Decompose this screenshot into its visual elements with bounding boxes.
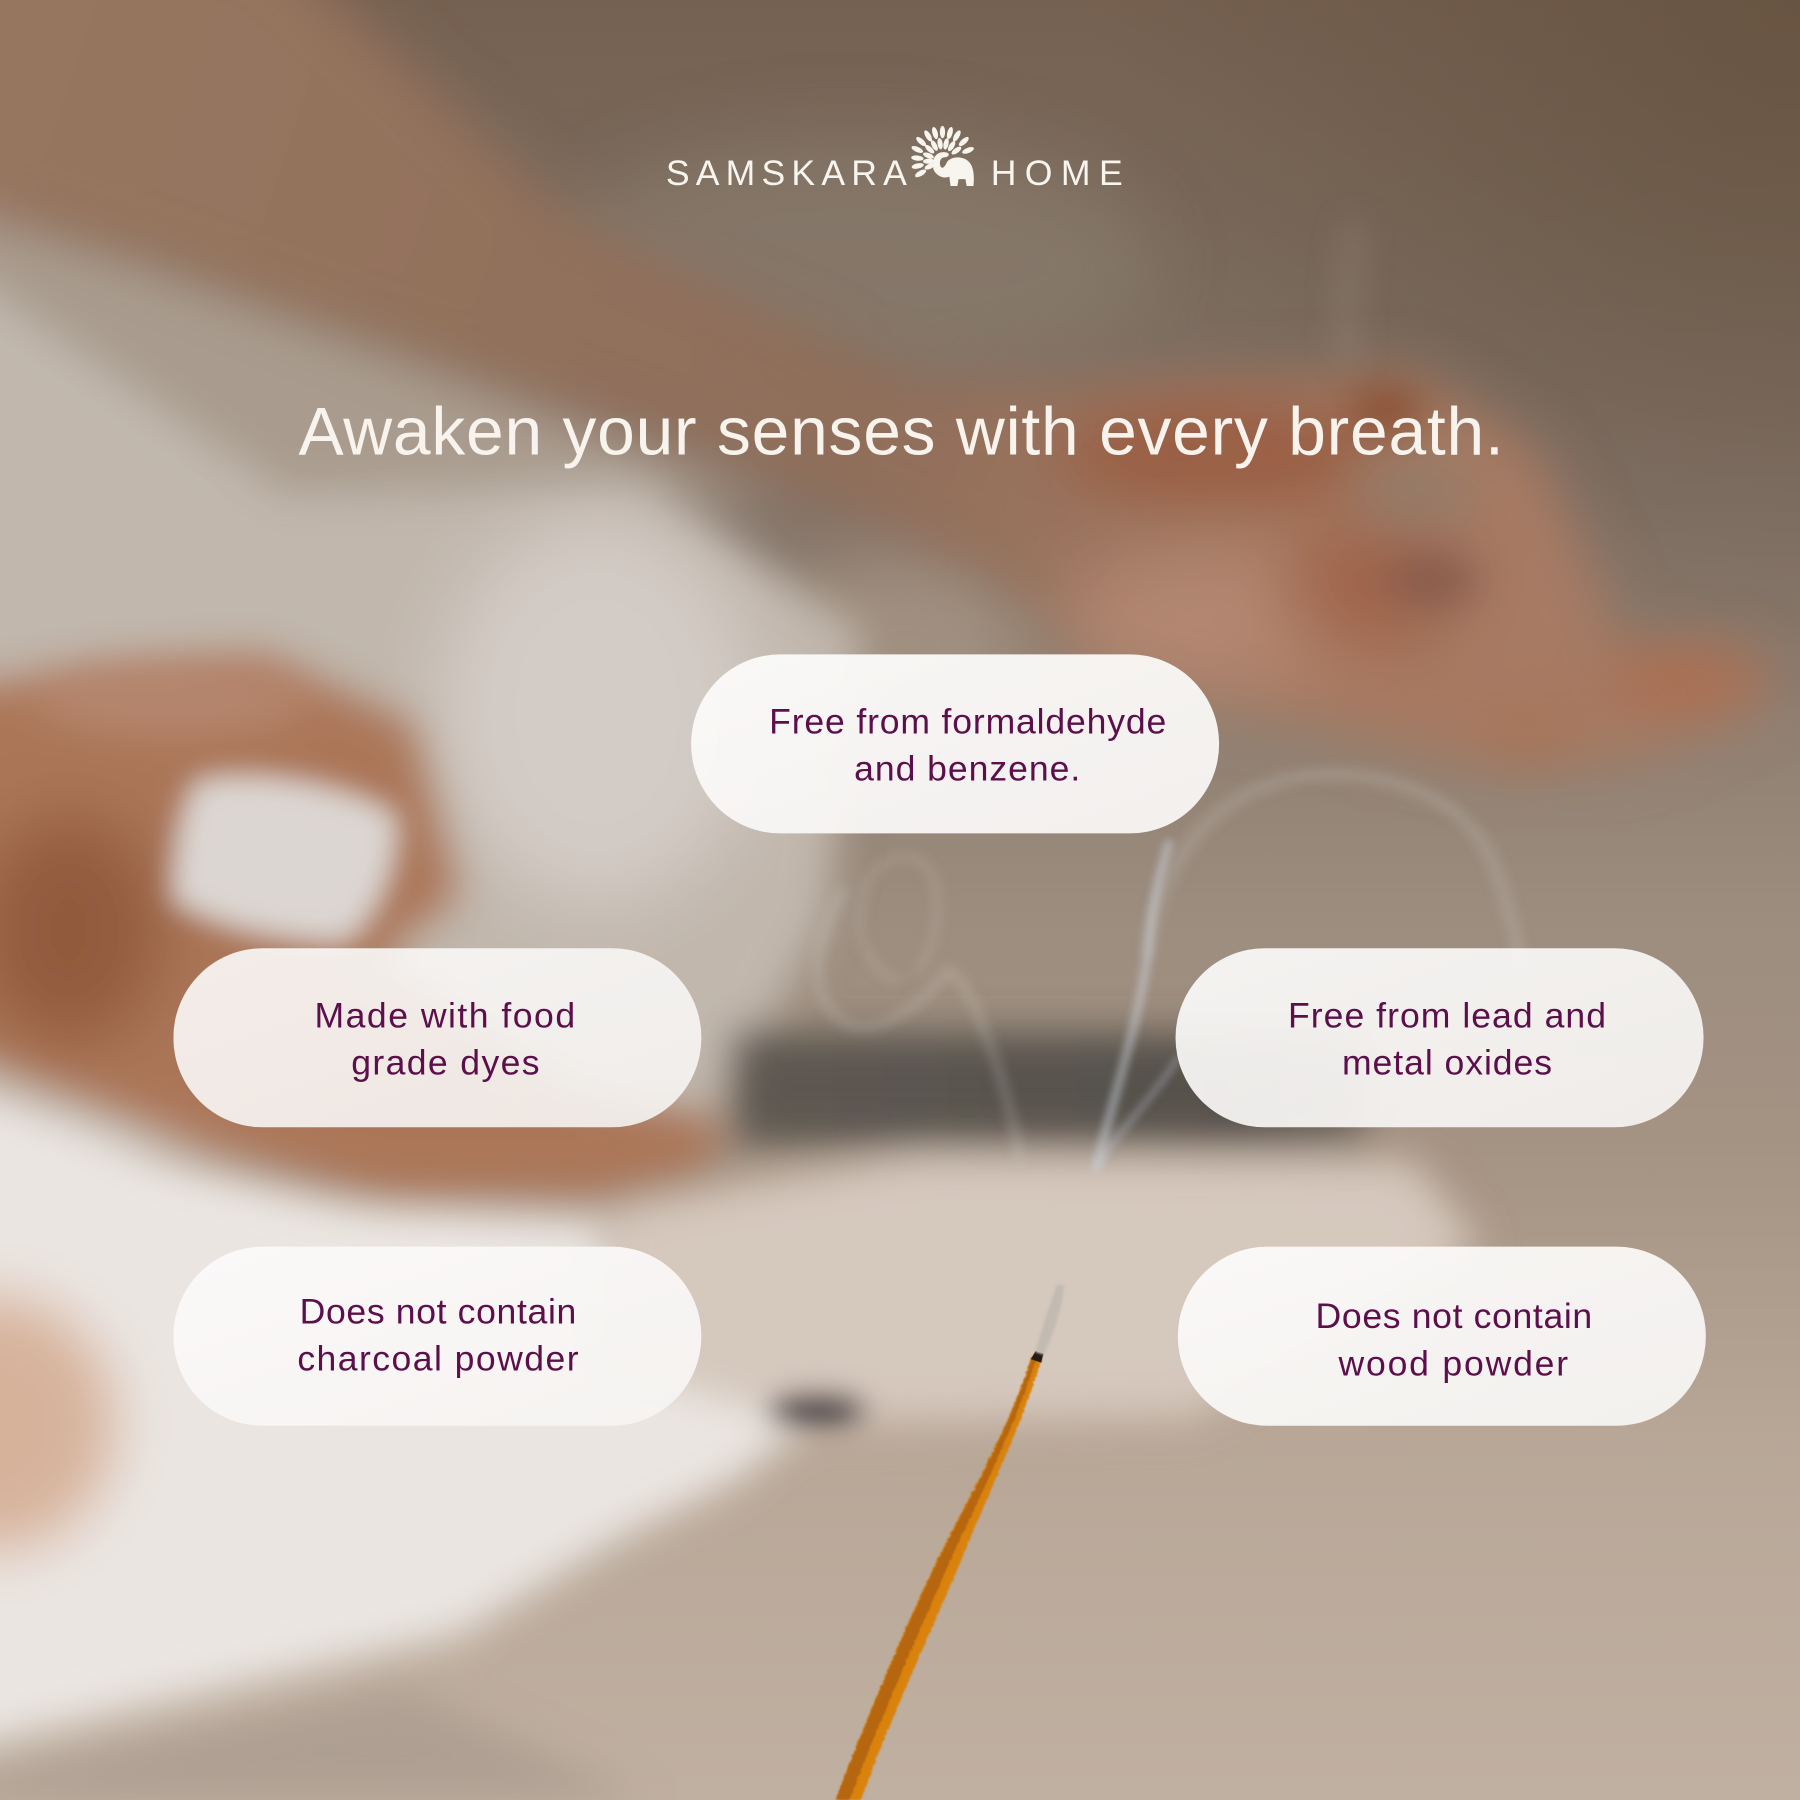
smoke wisps — [818, 230, 1521, 1169]
pill: charcoal powder: charcoal powder — [297, 1339, 579, 1379]
pill: wood powder: Does not contain — [1316, 1296, 1592, 1336]
pill: charcoal powder: Does not contain — [300, 1292, 576, 1332]
pill: formaldehyde and benzene: and benzene. — [854, 749, 1080, 789]
logo — [666, 126, 1123, 193]
pill: food grade dyes: grade dyes — [351, 1042, 540, 1082]
logo emblem: elephant under tree — [911, 126, 975, 186]
pill: formaldehyde and benzene: Free from formaldehyde — [769, 702, 1166, 742]
logo wordmark: SAMSKARA: SAMSKARA — [666, 153, 907, 193]
logo wordmark: HOME: HOME — [991, 153, 1123, 193]
heading: Awaken your senses with every breath. — [298, 395, 1504, 470]
pill: formaldehyde and benzene — [691, 654, 1219, 833]
pill: food grade dyes: Made with food — [315, 995, 575, 1035]
pill: wood powder: wood powder — [1338, 1343, 1568, 1383]
pill: lead and metal oxides: Free from lead and — [1288, 995, 1606, 1035]
pill: food grade dyes — [173, 948, 701, 1127]
pill: lead and metal oxides — [1176, 948, 1704, 1127]
pill: wood powder — [1178, 1247, 1706, 1426]
pill: charcoal powder — [173, 1247, 701, 1426]
pill: lead and metal oxides: metal oxides — [1342, 1042, 1552, 1082]
incense stick — [836, 1285, 1064, 1800]
